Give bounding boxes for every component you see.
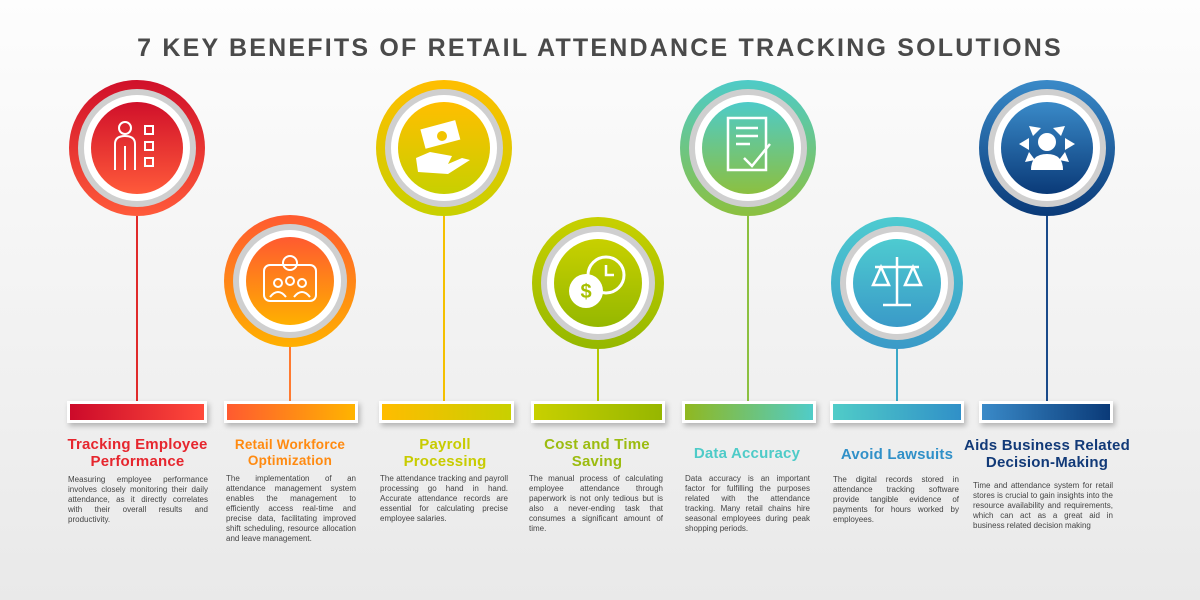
heading: col2 [235,437,345,468]
text: col5: Data accuracy is an important factor for fulfilling the purposes related with the attendance tracking. Many retail chains hire seasonal employees during peak shopping periods. [685,474,810,533]
heading: col7: Decision-Making [986,454,1108,471]
icons circles [69,80,1115,349]
heading: col3: Processing [404,453,486,470]
icon: data accuracy [680,80,816,216]
heading: col6: Avoid Lawsuits [841,446,953,463]
heading: col4 [544,436,650,470]
title: 7 KEY BENEFITS OF RETAIL ATTENDANCE TRACKING SOLUTIONS [137,34,1063,62]
heading: col7 [964,437,1130,471]
heading: col4: Saving [572,453,622,470]
text: col4: The manual process of calculating employee attendance through paperwork is not only tedious but is also a never-ending task that consumes a significant amount of time. [529,474,663,533]
heading: col2: Optimization [248,453,332,468]
text: col3: The attendance tracking and payroll processing go hand in hand. Accurate attendance records are essential for calculating precise employee salaries. [380,474,508,523]
heading: col3 [404,436,486,470]
text: col2: The implementation of an attendance management system enables the management to efficiently access real-time and precise data, facilitating improved shift scheduling, resource allocation and leave management. [226,474,356,543]
icon: payroll [376,80,512,216]
bars [66,401,1118,429]
icon: lawsuits [831,217,963,349]
connector lines [136,216,1048,401]
icon: tracking employee [69,80,205,216]
icon: cost time: $ [580,281,592,303]
heading: col2: Retail Workforce [235,437,345,452]
icon: decision making [979,80,1115,216]
heading: col1: Performance [91,453,184,470]
icon: workforce [224,215,356,347]
heading: col5: Data Accuracy [694,445,800,462]
text: col6: The digital records stored in attendance tracking software provide tangible evidence of payments for hours worked by employees. [833,475,959,524]
heading: col1: Tracking Employee [67,436,208,453]
heading: col1 [67,436,208,470]
icon: cost time [532,217,664,349]
heading: col4: Cost and Time [544,436,650,453]
text: col7: Time and attendance system for retail stores is crucial to gain insights into the resource availability and requirements, which can act as a great aid in business related decision making [973,481,1113,530]
heading: col3: Payroll [419,436,471,453]
text: col1: Measuring employee performance involves closely monitoring their daily attendance, as it directly correlates with their overall results and productivity. [68,475,208,524]
heading: col7: Aids Business Related [964,437,1130,454]
